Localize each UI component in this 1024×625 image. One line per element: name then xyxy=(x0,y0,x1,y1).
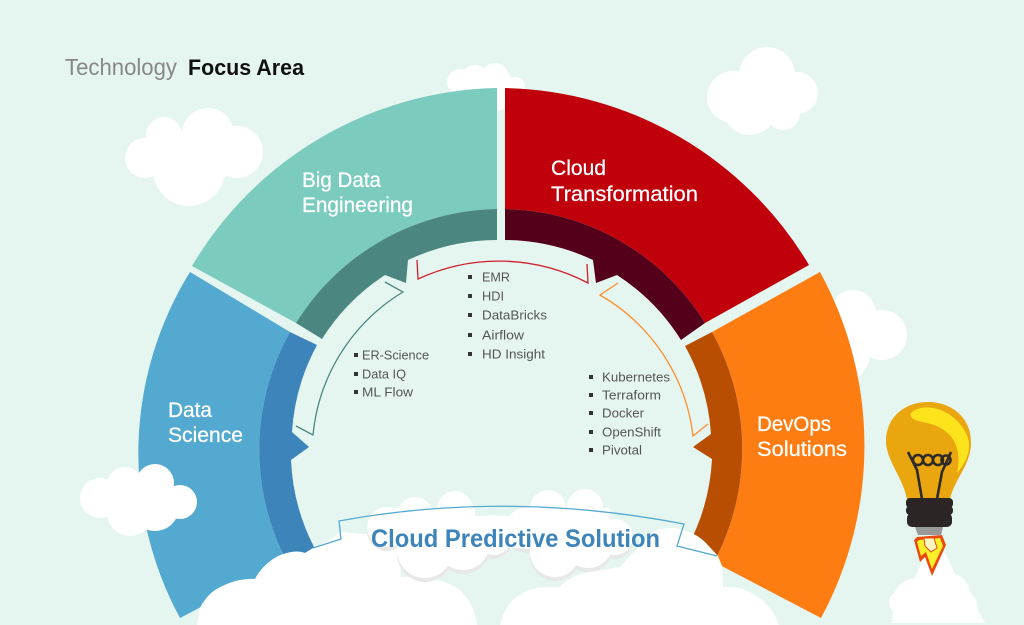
list: Big Data tools: HDI xyxy=(482,288,504,304)
list: Data Science tools: ER-Science xyxy=(362,348,429,362)
segment: Cloud Transformation: Transformation xyxy=(551,183,698,206)
segment: DevOps Solutions: DevOps xyxy=(757,413,831,436)
list: DevOps tools xyxy=(589,370,671,458)
title: Technology xyxy=(65,54,177,80)
bracket: Cloud xyxy=(600,283,708,436)
segment: Data Science xyxy=(138,272,317,618)
list: DevOps tools: OpenShift xyxy=(602,424,661,440)
title xyxy=(65,54,304,80)
segment: Big Data Engineering: Engineering xyxy=(302,194,413,217)
list: DevOps tools: Docker xyxy=(602,406,645,420)
icon: rocket light bulb xyxy=(886,402,985,623)
list: Data Science tools: Data IQ xyxy=(362,366,406,382)
background clouds behind arc xyxy=(125,47,907,386)
banner text: Cloud Predictive Solution xyxy=(371,525,660,553)
bracket: Data Science xyxy=(296,282,403,435)
list: Data Science tools: ML Flow xyxy=(362,384,414,400)
segment: Data Science: Science xyxy=(168,424,243,447)
segment: Big Data Engineering xyxy=(192,88,497,339)
segment: DevOps Solutions: Solutions xyxy=(757,438,847,461)
title: Focus Area xyxy=(188,55,304,80)
list: DevOps tools: Pivotal xyxy=(602,442,642,458)
segment: Cloud Transformation xyxy=(505,88,809,340)
bracket: Big Data xyxy=(417,260,588,283)
segment: DevOps Solutions xyxy=(685,272,864,618)
list: Big Data tools: EMR xyxy=(482,270,510,284)
small clouds behind banner xyxy=(367,489,633,582)
segment: Big Data Engineering: Big Data xyxy=(302,169,381,192)
list: Big Data tools: Airflow xyxy=(482,328,525,342)
segment: Data Science: Data xyxy=(168,399,212,422)
segment: Cloud Transformation: Cloud xyxy=(551,157,606,180)
list: DevOps tools: Kubernetes xyxy=(602,370,671,384)
left cloud over Data Science xyxy=(80,464,197,536)
big bottom clouds xyxy=(197,528,779,625)
list: Big Data tools: DataBricks xyxy=(482,308,548,322)
list: Big Data tools xyxy=(468,270,548,362)
list: Data Science tools xyxy=(354,348,429,400)
list: Big Data tools: HD Insight xyxy=(482,346,545,362)
banner ribbon xyxy=(313,506,717,556)
list: DevOps tools: Terraform xyxy=(602,388,661,402)
